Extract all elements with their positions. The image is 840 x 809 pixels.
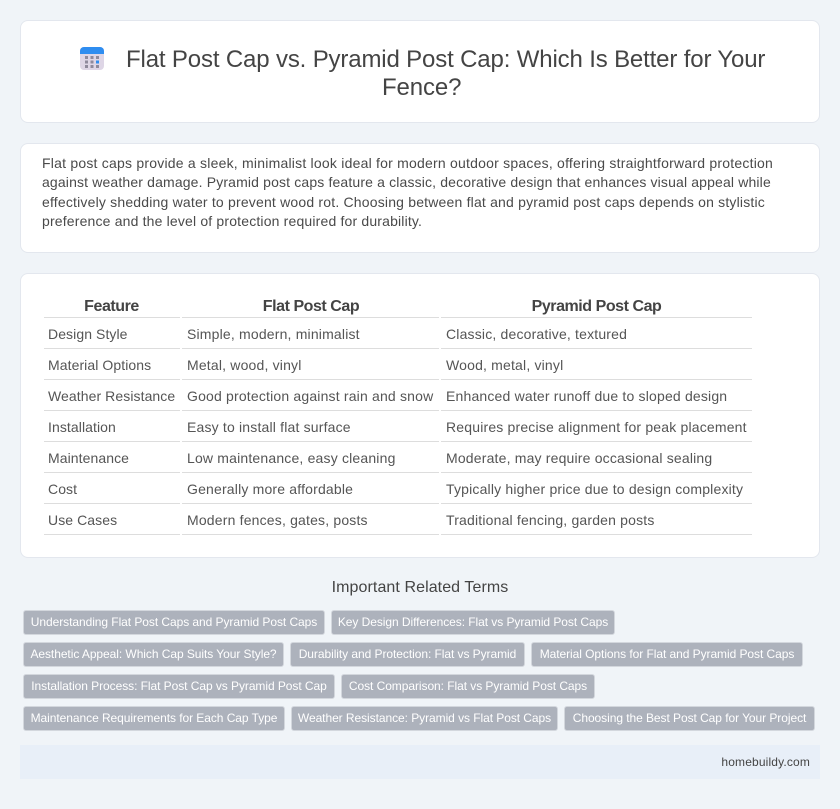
row: use cases: Use Cases bbox=[48, 512, 117, 528]
intro panel bbox=[20, 143, 820, 253]
row: material options bbox=[48, 357, 563, 373]
row: design style: Simple, modern, minimalist bbox=[187, 326, 360, 342]
related term tags: Aesthetic Appeal: Which Cap Suits Your Style? bbox=[30, 647, 277, 661]
related term tags: Cost Comparison: Flat vs Pyramid Post Caps bbox=[349, 679, 587, 693]
header row: Pyramid Post Cap bbox=[532, 298, 661, 315]
header row: Flat Post Cap bbox=[263, 298, 359, 315]
row: design style: Design Style bbox=[48, 326, 128, 342]
row: use cases: Modern fences, gates, posts bbox=[187, 512, 368, 528]
row: cost bbox=[48, 481, 743, 497]
related term tags: Durability and Protection: Flat vs Pyramid bbox=[299, 647, 516, 661]
related term tags: Key Design Differences: Flat vs Pyramid Post Caps bbox=[338, 615, 608, 629]
row: installation: Requires precise alignment for peak placement bbox=[446, 419, 747, 435]
icon: calendar bbox=[80, 47, 104, 70]
row: cost: Generally more affordable bbox=[187, 481, 353, 497]
row: maintenance bbox=[48, 450, 712, 466]
title panel: Fence? bbox=[382, 74, 461, 101]
row: weather resistance bbox=[48, 388, 727, 404]
row: material options: Wood, metal, vinyl bbox=[446, 357, 563, 373]
table panel bbox=[20, 273, 820, 558]
row: design style bbox=[48, 326, 627, 342]
related term tags: Understanding Flat Post Caps and Pyramid Post Caps bbox=[31, 615, 317, 629]
row: maintenance: Maintenance bbox=[48, 450, 129, 466]
row: weather resistance: Enhanced water runoff due to sloped design bbox=[446, 388, 727, 404]
title panel bbox=[20, 20, 820, 123]
row: use cases bbox=[48, 512, 655, 528]
row: installation bbox=[48, 419, 747, 435]
intro text: preference and the level of protection required for durability. bbox=[42, 213, 422, 229]
footer source: homebuildy.com bbox=[721, 755, 810, 769]
related term tags: Choosing the Best Post Cap for Your Project bbox=[573, 711, 806, 725]
row: maintenance: Low maintenance, easy cleaning bbox=[187, 450, 396, 466]
related term tags bbox=[23, 610, 815, 731]
related term tags: Installation Process: Flat Post Cap vs Pyramid Post Cap bbox=[31, 679, 327, 693]
row: maintenance: Moderate, may require occasional sealing bbox=[446, 450, 712, 466]
related term tags: Material Options for Flat and Pyramid Post Caps bbox=[540, 647, 794, 661]
intro text: effectively shedding water to prevent wood rot. Choosing between flat and pyramid post caps depends on stylistic bbox=[42, 194, 765, 210]
intro text: Flat post caps provide a sleek, minimalist look ideal for modern outdoor spaces, offering straightforward protection bbox=[42, 155, 773, 171]
comparison table bbox=[44, 298, 752, 535]
intro text bbox=[42, 155, 773, 229]
intro text: against weather damage. Pyramid post caps feature a classic, decorative design that enhances visual appeal while bbox=[42, 174, 771, 190]
row: installation: Installation bbox=[48, 419, 116, 435]
related term tags: Weather Resistance: Pyramid vs Flat Post Caps bbox=[298, 711, 551, 725]
row: material options: Metal, wood, vinyl bbox=[187, 357, 302, 373]
row: cost: Cost bbox=[48, 481, 77, 497]
row: installation: Easy to install flat surface bbox=[187, 419, 351, 435]
row: cost: Typically higher price due to design complexity bbox=[446, 481, 743, 497]
row: weather resistance: Weather Resistance bbox=[48, 388, 175, 404]
related term tags: Maintenance Requirements for Each Cap Type bbox=[31, 711, 277, 725]
title: Flat Post Cap vs. Pyramid Post Cap: Which Is Better for Your bbox=[126, 46, 765, 73]
row: material options: Material Options bbox=[48, 357, 151, 373]
header row bbox=[84, 298, 662, 315]
row: use cases: Traditional fencing, garden posts bbox=[446, 512, 655, 528]
row: weather resistance: Good protection against rain and snow bbox=[187, 388, 433, 404]
related terms heading: Important Related Terms bbox=[332, 579, 508, 596]
footer bar bbox=[20, 745, 820, 779]
row: design style: Classic, decorative, textured bbox=[446, 326, 627, 342]
header row: Feature bbox=[84, 298, 139, 315]
